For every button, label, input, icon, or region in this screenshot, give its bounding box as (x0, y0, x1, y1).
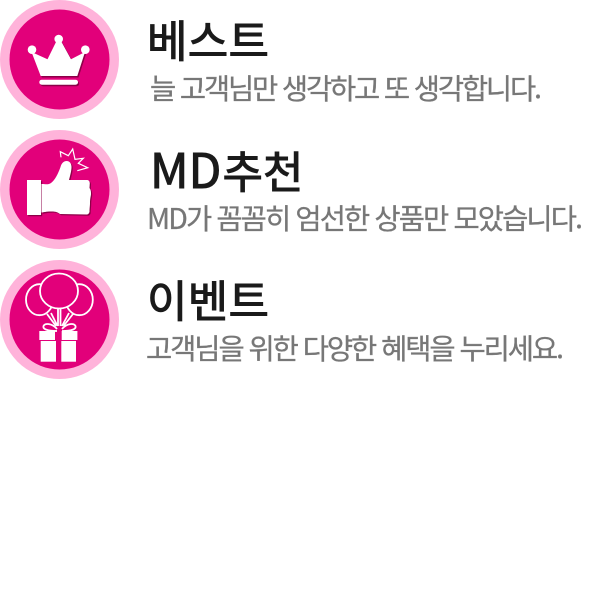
panel: MD pick (0, 130, 583, 249)
heading: MD pick: MD (150, 133, 221, 202)
icon: gift and balloons badge (0, 260, 119, 379)
icon: thumbs up badge (0, 130, 119, 249)
heading: event: 이벤트 (147, 266, 269, 330)
panel: event (0, 260, 564, 379)
text: event description: 고객님을 위한 다양한 혜택을 누리세요. (146, 327, 564, 368)
heading: best: 베스트 (147, 6, 269, 70)
text: MD pick description: MD가 꼼꼼히 엄선한 상품만 모았습니다. (147, 197, 583, 238)
heading: MD pick: 추천 (222, 137, 303, 201)
panel: best (0, 0, 542, 119)
text: best description: 늘 고객님만 생각하고 또 생각합니다. (150, 67, 542, 108)
icon: crown badge (0, 0, 119, 119)
